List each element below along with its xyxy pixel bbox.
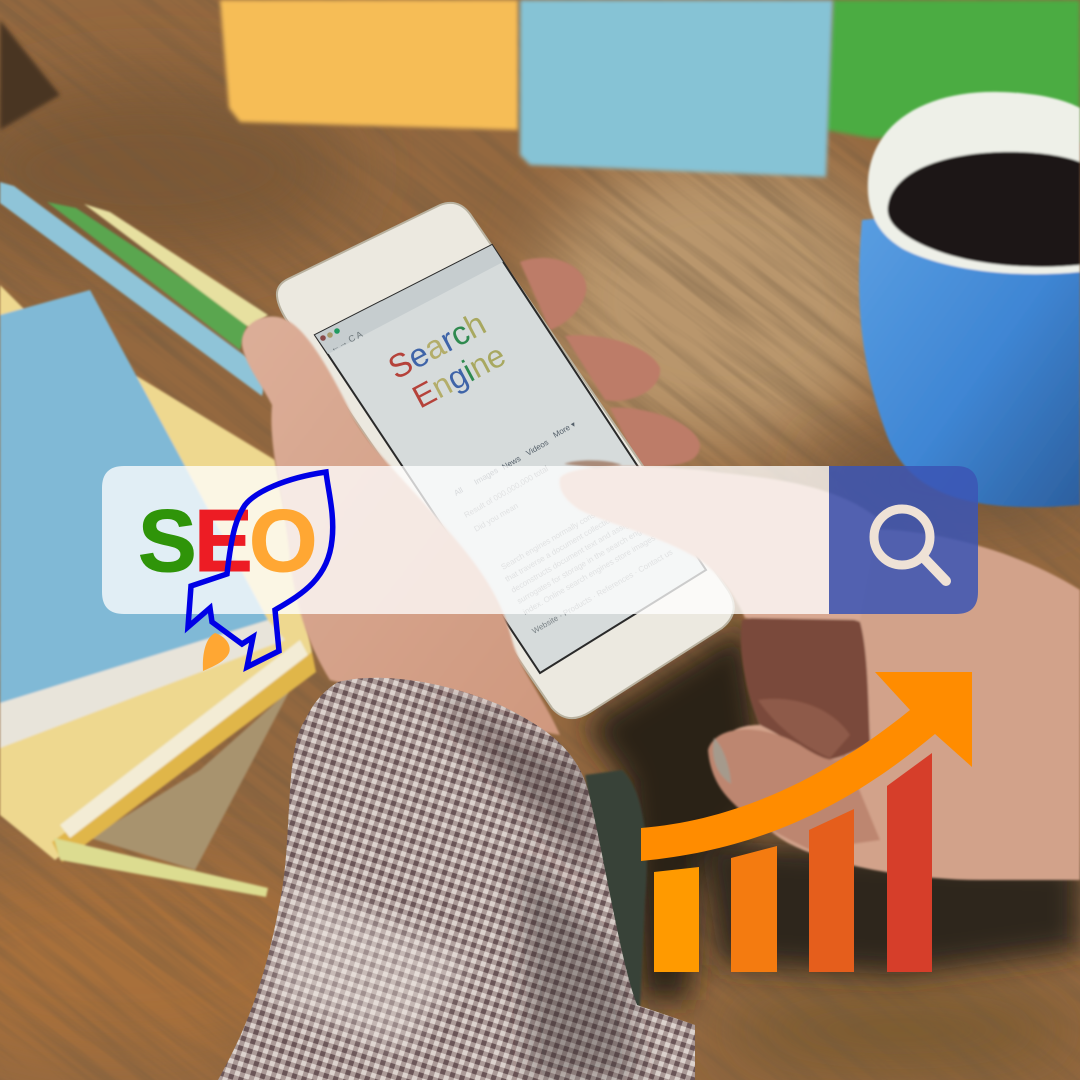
screen bbox=[315, 245, 706, 673]
checked fabric bbox=[210, 670, 700, 1080]
result tabs: News bbox=[500, 454, 522, 472]
SEO wordmark: E bbox=[194, 491, 253, 590]
folded finger in hollow bbox=[758, 699, 850, 758]
result tabs: Videos bbox=[524, 438, 550, 458]
cup body bbox=[859, 200, 1080, 507]
thumb nail bbox=[713, 738, 731, 784]
dark shadow below phone bbox=[585, 625, 770, 1000]
bar 1 bbox=[654, 867, 699, 972]
result text: deconstructs document text and assign bbox=[510, 518, 634, 595]
SEO wordmark: S bbox=[138, 491, 197, 590]
smartphone bbox=[277, 203, 734, 718]
left hand bbox=[242, 317, 560, 735]
search bar field bbox=[102, 466, 829, 614]
result tabs: More ▾ bbox=[552, 420, 577, 440]
result text: surrogates for storage in the search engine bbox=[516, 521, 653, 606]
fabric folds bbox=[270, 690, 640, 1080]
result text: Result of 000,000,000 total bbox=[462, 464, 550, 520]
right hand bbox=[560, 460, 1080, 880]
icon: rocket outline bbox=[188, 472, 333, 667]
icon: rocket flame bbox=[203, 633, 230, 671]
SEO logo bbox=[138, 472, 333, 671]
browser dots bbox=[320, 328, 340, 341]
palm bbox=[712, 529, 1080, 880]
green block bbox=[826, 0, 1080, 142]
fingers behind phone bbox=[520, 258, 700, 466]
page stack bbox=[0, 620, 285, 748]
result text: Website · Products · References · Contact us bbox=[530, 548, 674, 636]
result tabs bbox=[452, 420, 577, 498]
bar 3 bbox=[809, 809, 854, 972]
SEO wordmark: O bbox=[249, 491, 317, 590]
result tabs: Images bbox=[472, 466, 500, 487]
result tabs: All bbox=[452, 485, 465, 498]
brown notebook bbox=[90, 690, 290, 870]
growth chart bbox=[641, 672, 972, 972]
search bar bbox=[102, 466, 978, 614]
yellow notebook bbox=[0, 285, 312, 860]
thumb bbox=[708, 729, 880, 850]
bar 4 bbox=[887, 753, 932, 972]
blue block bbox=[520, 0, 833, 177]
growth arrow bbox=[641, 672, 972, 861]
result text bbox=[462, 464, 674, 636]
shirt sleeve bbox=[210, 670, 700, 1080]
result text: Search engines normally consist bbox=[500, 506, 604, 572]
index finger bbox=[560, 466, 880, 620]
dark green cuff bbox=[585, 770, 647, 1010]
phone body bbox=[277, 203, 734, 718]
result text: that traverse a document collection, bbox=[504, 513, 617, 584]
finger nail bbox=[564, 460, 622, 468]
blue notebook bbox=[0, 290, 268, 703]
icon: magnifier bbox=[874, 509, 946, 581]
cup rim bbox=[868, 92, 1080, 274]
browser icons: ←→ C A bbox=[328, 329, 364, 354]
engine logo: Engine bbox=[406, 337, 511, 415]
yellow block bbox=[220, 0, 518, 130]
search button bbox=[829, 466, 978, 614]
shadowed palm hollow bbox=[741, 614, 870, 760]
result text: index. Online search engines store images bbox=[522, 533, 657, 617]
pencils bbox=[0, 182, 268, 396]
bar 2 bbox=[731, 846, 777, 972]
notebooks bbox=[0, 285, 316, 897]
result text: Did you mean bbox=[472, 501, 520, 534]
browser bar bbox=[315, 245, 503, 354]
search logo: Search bbox=[382, 304, 492, 386]
dark shadow below hand bbox=[700, 840, 1080, 975]
coffee bbox=[888, 152, 1080, 267]
green-yellow ribbon bbox=[54, 838, 268, 897]
coffee cup bbox=[859, 92, 1080, 507]
